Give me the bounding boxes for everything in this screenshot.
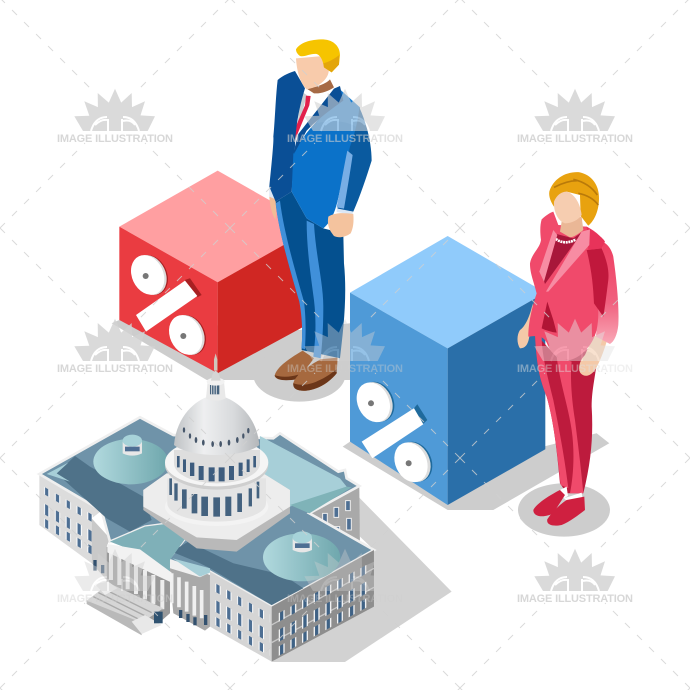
watermark middle right: IMAGE ILLUSTRATION: [517, 363, 633, 375]
lower colonnade: [165, 478, 268, 526]
front right wall: [210, 572, 272, 662]
cube faces: [350, 236, 545, 505]
blouse and pearl necklace: [542, 232, 583, 284]
lantern and statue: [206, 353, 226, 401]
dome shell: [174, 397, 259, 455]
shoes and socks: [533, 487, 585, 526]
man in blue suit: [253, 39, 372, 402]
jacket: [269, 71, 372, 228]
watermark top right: IMAGE ILLUSTRATION: [517, 133, 633, 145]
right small dome: [263, 531, 340, 581]
percent symbol: [350, 376, 439, 488]
central portico wall and columns: [168, 558, 210, 631]
building shadow: [272, 497, 452, 662]
front portico roof: [107, 523, 187, 583]
cornice ring: [165, 440, 268, 490]
right hand: [328, 208, 354, 237]
left small dome: [93, 435, 168, 484]
watermark top centre: IMAGE ILLUSTRATION: [287, 133, 403, 145]
left hand and cuff: [269, 187, 276, 219]
trousers: [276, 192, 345, 358]
watermark middle centre: [287, 319, 403, 375]
pale roof sections: [47, 436, 352, 513]
watermark bottom right: IMAGE ILLUSTRATION: [517, 593, 633, 605]
watermark top left: [57, 89, 173, 145]
shirt and tie: [294, 85, 337, 145]
right sleeve: [593, 239, 619, 344]
side pavilion wall: [92, 518, 110, 580]
right end wall: [272, 550, 374, 662]
watermark top centre: [287, 89, 403, 145]
watermark middle centre: IMAGE ILLUSTRATION: [287, 363, 403, 375]
oval windows: [183, 427, 249, 447]
left hand: [517, 303, 533, 348]
right hand: [579, 335, 607, 376]
head: [549, 172, 599, 237]
watermark bottom left: IMAGE ILLUSTRATION: [57, 593, 173, 605]
head: [296, 39, 340, 93]
jacket: [528, 212, 609, 360]
shadow ellipse: [253, 348, 345, 402]
steps: [87, 582, 163, 635]
upper drum windows: [174, 450, 260, 483]
shadow ellipse: [518, 483, 610, 537]
left wing wall: [39, 474, 102, 563]
red cube with percent sign: [112, 171, 350, 380]
dark roof sections: [57, 456, 303, 605]
left portico with columns: [95, 547, 170, 625]
shoes: [275, 351, 338, 391]
shadow of red cube: [112, 320, 350, 380]
lapels: [539, 229, 590, 292]
watermark bottom centre: IMAGE ILLUSTRATION: [287, 593, 403, 605]
watermark middle left: [57, 319, 173, 375]
upper right wing wall: [309, 486, 360, 563]
dome platform: [143, 473, 290, 552]
woman in red suit: [517, 172, 619, 537]
shadow of blue cube: [343, 433, 609, 510]
watermark bottom centre: [287, 549, 403, 605]
watermark bottom right: [517, 549, 633, 605]
watermark middle left: IMAGE ILLUSTRATION: [57, 363, 173, 375]
blue cube with percent sign: [343, 236, 609, 510]
capitol dome: [165, 353, 268, 526]
trousers: [535, 333, 598, 493]
cube faces: [119, 171, 316, 373]
capitol building: [39, 353, 452, 662]
watermark top left: IMAGE ILLUSTRATION: [57, 133, 173, 145]
watermark bottom left: [57, 549, 173, 605]
watermark middle right: [517, 319, 633, 375]
percent symbol: [125, 250, 212, 360]
watermark top right: [517, 89, 633, 145]
roof base: [39, 417, 374, 607]
